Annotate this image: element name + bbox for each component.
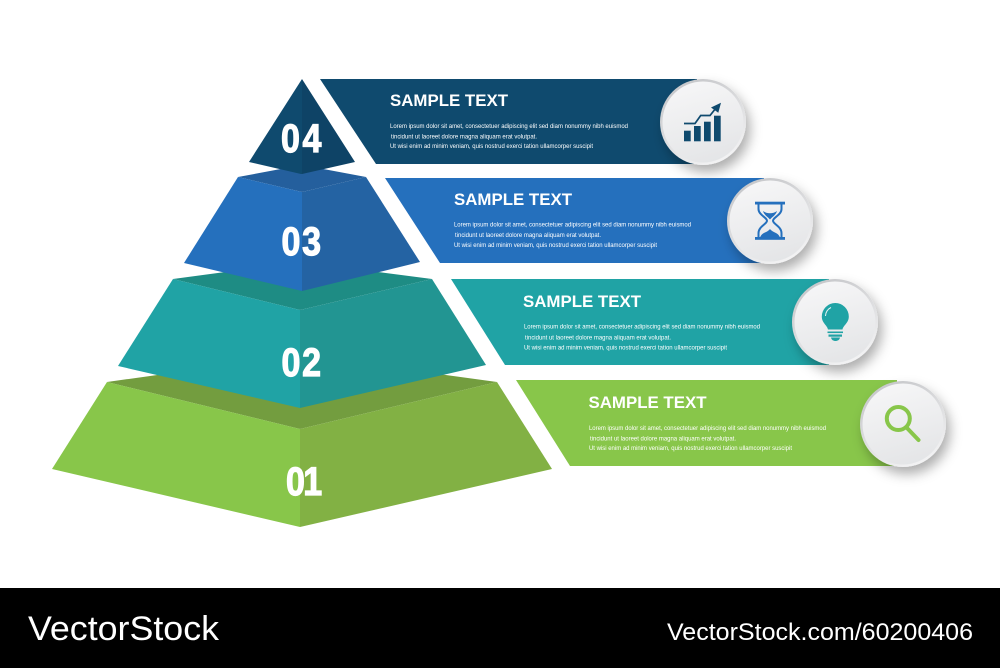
body text 02 [524, 324, 760, 352]
tier 01 [52, 355, 552, 527]
body text 03 [454, 222, 691, 249]
body text 01: tincidunt ut laoreet dolore magna aliquam erat volutpat. [590, 436, 736, 442]
body text 01 [589, 425, 826, 452]
icon badge: growth chart [660, 79, 746, 165]
pyramid [52, 79, 552, 527]
number 01: 01 [286, 458, 322, 504]
body text 03: tincidunt ut laoreet dolore magna aliquam erat volutpat. [455, 232, 601, 239]
body text 02: tincidunt ut laoreet dolore magna aliquam erat volutpat. [525, 334, 671, 342]
banner 04 [320, 79, 746, 165]
icon badge: hourglass [727, 178, 813, 264]
banner 01 [516, 380, 946, 467]
body text 04: tincidunt ut laoreet dolore magna aliquam erat volutpat. [391, 134, 537, 140]
body text 03: Lorem ipsum dolor sit amet, consectetuer adipiscing elit sed diam nonummy nibh euismod [454, 222, 691, 228]
body text 04 [390, 123, 628, 150]
body text 02: Lorem ipsum dolor sit amet, consectetuer adipiscing elit sed diam nonummy nibh euismod [524, 324, 760, 330]
icon badge: magnifying glass [860, 381, 946, 467]
body text 02: Ut wisi enim ad minim veniam, quis nostrud exerci tation ullamcorper suscipit [524, 344, 727, 352]
body text 01: Ut wisi enim ad minim veniam, quis nostrud exerci tation ullamcorper suscipit [589, 445, 792, 452]
footer logo text: VectorStock [28, 610, 220, 648]
footer url: VectorStock.com/60200406 [667, 619, 973, 646]
banner 02 [451, 279, 878, 365]
heading 02: SAMPLE TEXT [523, 292, 642, 311]
body text 04: Lorem ipsum dolor sit amet, consectetuer adipiscing elit sed diam nonummy nibh euismod [390, 123, 628, 130]
number 04: 04 [281, 115, 324, 161]
body text 04: Ut wisi enim ad minim veniam, quis nostrud exerci tation ullamcorper suscipit [390, 143, 593, 150]
body text 03: Ut wisi enim ad minim veniam, quis nostrud exerci tation ullamcorper suscipit [454, 242, 657, 249]
footer bar [0, 588, 1000, 668]
banner 03 [385, 178, 813, 264]
heading 04: SAMPLE TEXT [390, 91, 509, 110]
number 02: 02 [282, 339, 323, 385]
body text 01: Lorem ipsum dolor sit amet, consectetuer adipiscing elit sed diam nonummy nibh euismod [589, 425, 826, 432]
tier 03 [184, 165, 420, 291]
heading 03: SAMPLE TEXT [454, 190, 573, 209]
tier 04 [249, 79, 355, 174]
tier 02 [118, 262, 486, 408]
icon badge: light bulb [792, 279, 878, 365]
heading 01: SAMPLE TEXT [588, 393, 707, 412]
number 03: 03 [282, 218, 323, 264]
